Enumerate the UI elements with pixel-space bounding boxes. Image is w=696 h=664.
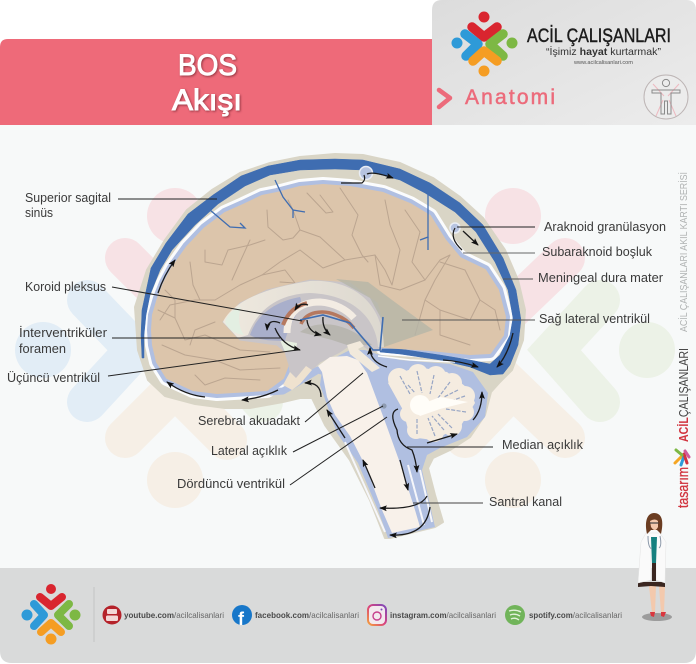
label: İnterventriküler foramen: İnterventriküler bbox=[19, 326, 107, 340]
cerebellum bbox=[388, 364, 475, 442]
third ventricle outflow patch bbox=[280, 340, 297, 352]
brainstem and spinal cord bbox=[318, 356, 420, 533]
icon: side mini logo bbox=[675, 450, 689, 465]
spinal white strips bbox=[345, 442, 432, 532]
subarachnoid space bbox=[152, 185, 505, 393]
label: Koroid pleksus bbox=[25, 280, 302, 321]
label: Lateral açıklık: Lateral açıklık bbox=[211, 444, 288, 458]
label: Serebral akuadakt bbox=[198, 373, 363, 428]
social: spotify bbox=[505, 605, 622, 625]
corpus callosum bbox=[223, 281, 384, 347]
label: İnterventriküler foramen: foramen bbox=[19, 342, 66, 356]
slogan: “İşimiz hayat kurtarmak” bbox=[546, 45, 662, 58]
label: Subaraknoid boşluk: Subaraknoid boşluk bbox=[542, 245, 653, 259]
doctor face bbox=[650, 520, 658, 530]
label: Sağ lateral ventrikül: Sağ lateral ventrikül bbox=[539, 312, 650, 326]
label: Koroid pleksus: Koroid pleksus bbox=[25, 280, 106, 294]
social: facebook: f bbox=[238, 609, 245, 629]
footer divider bbox=[93, 587, 95, 642]
social: instagram bbox=[368, 605, 496, 625]
background watermark logos bbox=[15, 188, 675, 508]
doctor skirt bbox=[638, 582, 665, 587]
flow arrows bbox=[158, 173, 513, 535]
fornix bbox=[287, 302, 354, 333]
label: Superior sagital sinüs: sinüs bbox=[25, 206, 53, 220]
spinal and cerebellar subarachnoid space bbox=[320, 350, 488, 538]
footer bar bbox=[0, 568, 696, 663]
label: Üçüncü ventrikül bbox=[7, 350, 297, 385]
lateral ventricle bbox=[250, 297, 301, 341]
icon: header logo bbox=[452, 12, 518, 76]
section name: Anatomi bbox=[465, 86, 555, 109]
website: www.acilcalisanlari.com bbox=[573, 60, 633, 66]
pituitary stalk bbox=[283, 366, 312, 390]
side text: tasarım: tasarım bbox=[675, 467, 692, 508]
label: Meningeal dura mater: Meningeal dura mater bbox=[538, 271, 663, 285]
label: Superior sagital sinüs: Superior sagital bbox=[25, 191, 111, 205]
cerebellar folia bbox=[400, 371, 466, 436]
subarachnoid cistern ribbon bbox=[270, 370, 328, 395]
fourth ventricle lateral aperture bbox=[381, 403, 387, 409]
doctor shoes bbox=[650, 612, 666, 617]
social: facebook bbox=[232, 605, 359, 629]
white arachnoid layer bbox=[152, 185, 505, 393]
doctor glasses bbox=[650, 522, 658, 524]
tentorium highlight bbox=[378, 356, 455, 362]
doctor coat bbox=[638, 533, 666, 583]
doctor shadow bbox=[642, 613, 672, 621]
social: instagram: instagram.com/acilcalisanlari bbox=[390, 610, 496, 620]
meningeal dura and superior sagittal sinus bbox=[141, 159, 521, 375]
label: Superior sagital sinüs bbox=[25, 191, 217, 220]
label: Dördüncü ventrikül bbox=[177, 417, 387, 491]
social: facebook: facebook.com/acilcalisanlari bbox=[255, 610, 359, 620]
social: spotify: spotify.com/acilcalisanlari bbox=[529, 610, 622, 620]
cerebral gyri bbox=[158, 188, 500, 385]
label: İnterventriküler foramen bbox=[19, 326, 280, 356]
doctor legs bbox=[649, 586, 665, 613]
label: Üçüncü ventrikül: Üçüncü ventrikül bbox=[7, 371, 100, 385]
title banner bbox=[0, 39, 432, 125]
cerebral veins bbox=[210, 180, 428, 350]
label: Serebral akuadakt: Serebral akuadakt bbox=[198, 414, 300, 428]
label: Lateral açıklık bbox=[211, 406, 383, 458]
brain diagram bbox=[135, 154, 525, 538]
midbrain tectum bbox=[347, 341, 380, 372]
doctor shirt bbox=[651, 537, 657, 563]
side text: series name: ACİL ÇALIŞANLARI AKIL KARTI SERİSİ bbox=[677, 172, 690, 332]
label: Santral kanal: Santral kanal bbox=[489, 495, 562, 509]
title text bbox=[172, 49, 242, 117]
header panel bbox=[432, 0, 696, 125]
brand name: ACİL ÇALIŞANLARI bbox=[527, 26, 671, 47]
thalamus region bbox=[300, 324, 372, 346]
social: youtube: youtube.com/acilcalisanlari bbox=[124, 610, 224, 620]
right lateral ventricle bbox=[336, 279, 433, 347]
title text: Akışı bbox=[172, 84, 242, 117]
white matter and ventricle region bbox=[223, 280, 384, 385]
cerebrum bbox=[152, 185, 505, 393]
doctor hair bbox=[646, 513, 662, 534]
icon: section chevron bbox=[439, 90, 450, 107]
label: Median açıklık: Median açıklık bbox=[502, 438, 584, 452]
side text: brand credit: ACİLÇALIŞANLARI bbox=[676, 348, 691, 442]
icon: anatomy figure bbox=[644, 75, 688, 119]
page background bbox=[0, 124, 696, 570]
title text: BOS bbox=[178, 49, 237, 82]
label: Dördüncü ventrikül: Dördüncü ventrikül bbox=[177, 477, 285, 491]
label: Araknoid granülasyon: Araknoid granülasyon bbox=[544, 220, 666, 234]
social: youtube bbox=[102, 606, 224, 624]
skull outline bbox=[135, 154, 525, 538]
arachnoid granulations bbox=[360, 166, 460, 233]
septum patch bbox=[225, 307, 244, 335]
stethoscope bbox=[648, 536, 661, 549]
icon: footer logo bbox=[22, 584, 80, 644]
doctor illustration bbox=[638, 513, 672, 621]
choroid plexus bbox=[283, 303, 401, 434]
